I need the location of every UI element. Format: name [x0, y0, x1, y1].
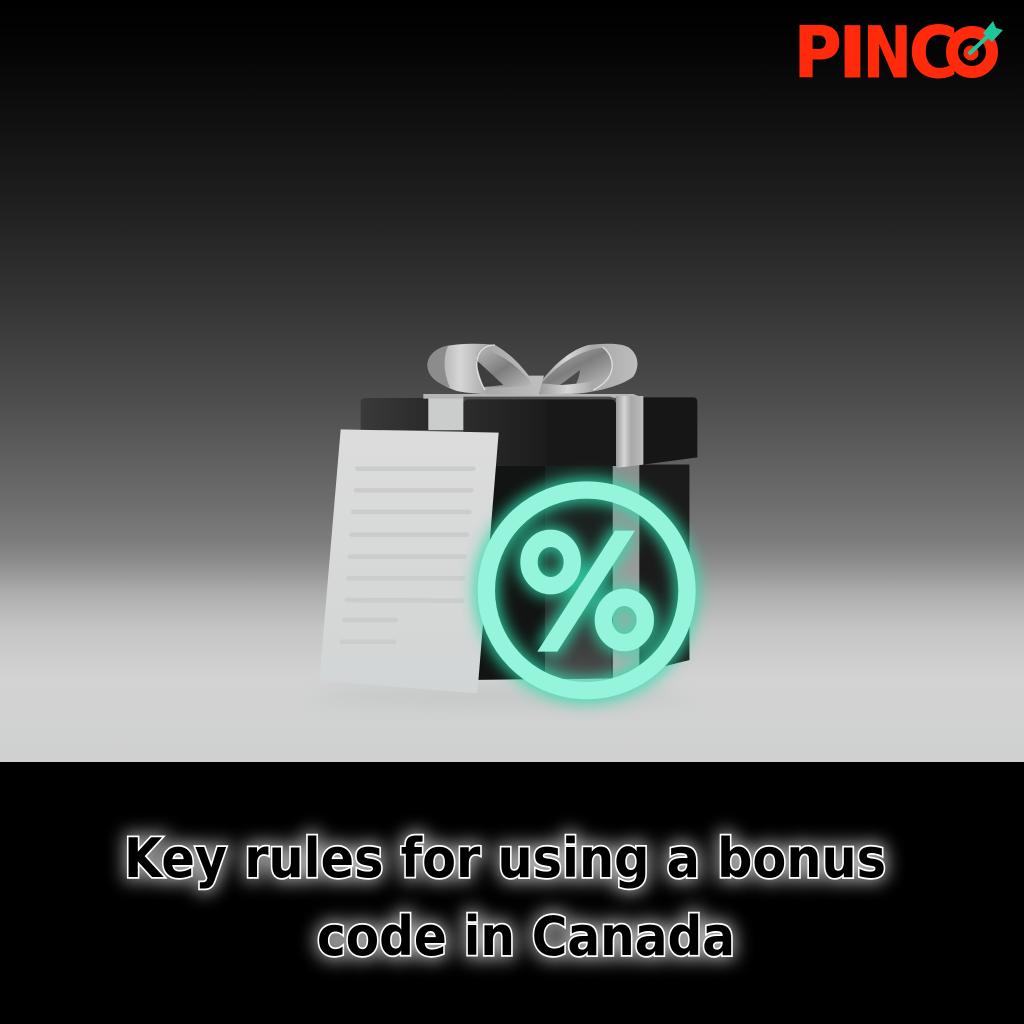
badge ring [486, 490, 687, 691]
illustration: gift box, paper and percent badge [319, 344, 697, 693]
logo letter I: I [838, 12, 867, 94]
title text [124, 827, 886, 968]
gift box lid [361, 397, 697, 466]
background gradient scene [0, 0, 1024, 762]
ground shadow [310, 688, 690, 704]
title text: code in Canada [317, 905, 735, 968]
title glow [124, 827, 886, 968]
logo: PINCO [794, 12, 1003, 94]
ribbon on lid [423, 394, 643, 468]
logo target O [952, 32, 992, 72]
title glow: code in Canada [317, 905, 735, 968]
left bow loop [427, 344, 537, 395]
logo arrow [970, 21, 1003, 53]
right bow loop [538, 344, 637, 394]
logo letter P: P [794, 12, 842, 94]
document text lines [342, 469, 473, 642]
percent badge [486, 490, 687, 691]
bow knot [528, 376, 544, 396]
title text: Key rules for using a bonus [124, 827, 886, 890]
ribbon on box front [613, 465, 639, 678]
title [124, 827, 886, 968]
black caption band [0, 762, 1024, 1024]
logo letter N: N [863, 12, 912, 94]
ribbon bow [427, 344, 637, 396]
title glow: Key rules for using a bonus [124, 827, 886, 890]
badge glow [486, 490, 687, 691]
percent sign [529, 531, 645, 652]
gift box body [467, 465, 689, 680]
document sheet [319, 429, 499, 693]
logo letter C: C [909, 12, 958, 94]
